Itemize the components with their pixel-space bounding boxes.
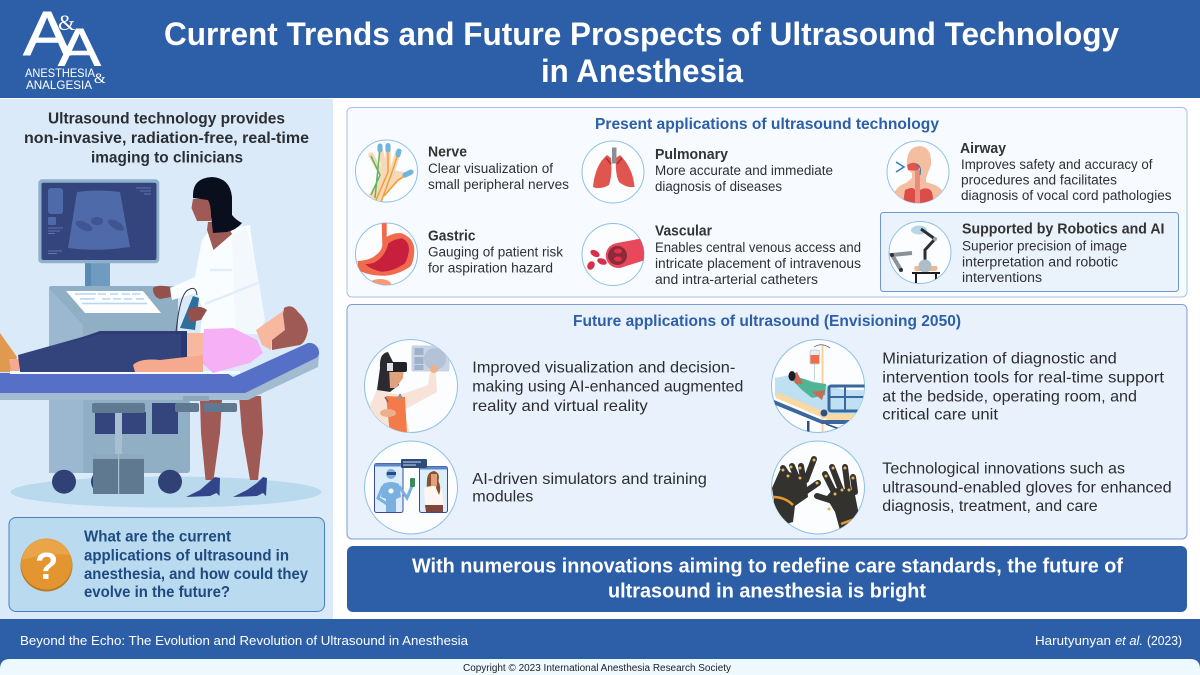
patient lying on bed: [0, 306, 308, 374]
text: airway: [960, 140, 1172, 203]
logo: Anesthesia & Analgesia: ANALGESIA: [26, 78, 92, 92]
text: robotics and AI: interventions: [962, 270, 1042, 285]
text: gastric: Gastric: [428, 228, 476, 245]
title: [164, 16, 1119, 89]
footer: [0, 619, 1200, 675]
panel: present applications: [347, 108, 1187, 297]
icon: lungs: [582, 141, 644, 203]
citation: Harutyunyan: [1035, 634, 1111, 648]
item: vascular: [582, 223, 861, 287]
illustration: clinician scanning patient with ultrasound machine: [0, 177, 322, 508]
heading: future applications: Future applications of ultrasound (Envisioning 2050): [573, 313, 961, 330]
icon: sensor gloves: [772, 441, 864, 534]
intro statement: Ultrasound technology provides: [48, 110, 285, 128]
logo: Anesthesia & Analgesia: [23, 0, 106, 92]
treatment bed: [0, 343, 319, 412]
icon: airway anatomy: [887, 141, 949, 204]
text: AI simulators: AI-driven simulators and training: [472, 471, 707, 488]
icon: stomach: [356, 222, 418, 289]
item: airway: [887, 140, 1172, 204]
text: vascular: Enables central venous access and: [655, 240, 861, 255]
text: miniaturization: critical care unit: [882, 407, 999, 424]
icon: patient in hospital bed: [772, 340, 870, 437]
text: ultrasound gloves: ultrasound-enabled gloves for enhanced: [882, 480, 1172, 497]
publication title: Beyond the Echo: The Evolution and Revolution of Ultrasound in Anesthesia: [20, 634, 468, 648]
item: pulmonary: [582, 141, 833, 203]
text: gastric: [428, 228, 563, 276]
panel: future applications: [347, 304, 1187, 539]
citation: [1035, 634, 1182, 648]
text: miniaturization: at the bedside, operating room, and: [882, 389, 1137, 406]
icon: blood vessel: [582, 224, 645, 286]
title: Current Trends and Future Prospects of Ultrasound Technology: [164, 16, 1119, 52]
icon: hand nerves: [356, 140, 418, 203]
text: robotics and AI: interpretation and robotic: [962, 254, 1118, 269]
text: pulmonary: [655, 146, 833, 194]
copyright: Copyright © 2023 International Anesthesia Research Society: [463, 663, 731, 674]
citation: (2023): [1147, 634, 1182, 648]
question text: [84, 529, 308, 601]
title: in Anesthesia: [541, 53, 743, 89]
intro statement: imaging to clinicians: [91, 150, 243, 166]
text: gastric: for aspiration hazard: [428, 261, 553, 276]
text: nerve: small peripheral nerves: [428, 177, 569, 192]
icon: clinician with VR headset: [364, 340, 458, 434]
text: miniaturization: intervention tools for real-time support: [882, 370, 1165, 387]
ultrasound probe and cable: [176, 288, 207, 332]
callout: key question: [9, 518, 324, 612]
logo: Anesthesia & Analgesia: ANESTHESIA: [25, 66, 95, 80]
text: pulmonary: diagnosis of diseases: [655, 179, 782, 194]
conclusion banner: With numerous innovations aiming to redefine care standards, the future of: [412, 554, 1123, 578]
text: augmented reality: [472, 360, 743, 415]
text: pulmonary: Pulmonary: [655, 146, 729, 163]
text: AI simulators: [472, 471, 707, 506]
text: gastric: Gauging of patient risk: [428, 245, 563, 260]
text: ultrasound gloves: [882, 461, 1172, 515]
heading: present applications: Present applications of ultrasound technology: [595, 116, 939, 133]
text: airway: procedures and facilitates: [961, 172, 1117, 188]
text: airway: Airway: [960, 140, 1007, 157]
text: augmented reality: making using AI-enhanced augmented: [472, 379, 743, 396]
question text: evolve in the future?: [84, 584, 230, 601]
logo: Anesthesia & Analgesia: &: [58, 10, 75, 35]
item: nerve: [356, 140, 569, 203]
question text: anesthesia, and how could they: [84, 566, 308, 583]
text: nerve: [428, 144, 569, 192]
text: nerve: Clear visualization of: [428, 161, 553, 176]
text: airway: diagnosis of vocal cord pathologies: [961, 188, 1172, 203]
text: miniaturization: Miniaturization of diagnostic and: [882, 351, 1117, 368]
logo: Anesthesia & Analgesia: A: [23, 0, 71, 69]
text: robotics and AI: Superior precision of image: [962, 238, 1127, 253]
logo: Anesthesia & Analgesia: &: [94, 71, 106, 87]
item: AI simulators: [364, 441, 707, 534]
text: airway: Improves safety and accuracy of: [961, 157, 1153, 172]
ultrasound console: [49, 286, 190, 494]
callout: supported by robotics and AI: [880, 212, 1178, 292]
intro statement: [24, 110, 309, 166]
text: augmented reality: reality and virtual reality: [472, 398, 648, 415]
question text: applications of ultrasound in: [84, 548, 289, 565]
monitor: [38, 179, 159, 287]
icon: question mark: [20, 538, 72, 592]
question text: What are the current: [84, 529, 231, 546]
text: ultrasound gloves: diagnosis, treatment, and care: [882, 498, 1098, 515]
logo: Anesthesia & Analgesia: A: [58, 18, 101, 78]
intro statement: non-invasive, radiation-free, real-time: [24, 130, 309, 147]
text: ultrasound gloves: Technological innovations such as: [882, 461, 1125, 478]
conclusion banner: ultrasound in anesthesia is bright: [608, 580, 926, 602]
item: miniaturization: [772, 340, 1165, 437]
text: nerve: Nerve: [428, 144, 467, 161]
text: pulmonary: More accurate and immediate: [655, 163, 833, 178]
text: vascular: intricate placement of intravenous: [655, 256, 861, 271]
conclusion banner: [347, 546, 1187, 612]
text: augmented reality: Improved visualization and decision-: [472, 360, 735, 377]
icon: AI simulator screens: [364, 441, 458, 534]
icon: surgical robot: [889, 222, 951, 284]
text: robotics and AI: [962, 221, 1164, 285]
header banner: [0, 0, 1200, 98]
icon: question mark: ?: [35, 546, 58, 588]
text: AI simulators: modules: [472, 489, 533, 506]
item: ultrasound gloves: [772, 441, 1172, 534]
panel: left introduction: [0, 99, 333, 619]
text: robotics and AI: Supported by Robotics and AI: [962, 221, 1164, 238]
citation: et al.: [1115, 634, 1143, 648]
clinician legs and shoes: [186, 396, 267, 497]
text: vascular: [655, 223, 861, 287]
item: augmented reality: [364, 340, 743, 434]
text: miniaturization: [882, 351, 1165, 424]
clinician torso, head and hands: [153, 177, 265, 334]
item: gastric: [356, 222, 563, 289]
text: vascular: and intra-arterial catheters: [655, 272, 818, 287]
text: vascular: Vascular: [655, 223, 712, 240]
